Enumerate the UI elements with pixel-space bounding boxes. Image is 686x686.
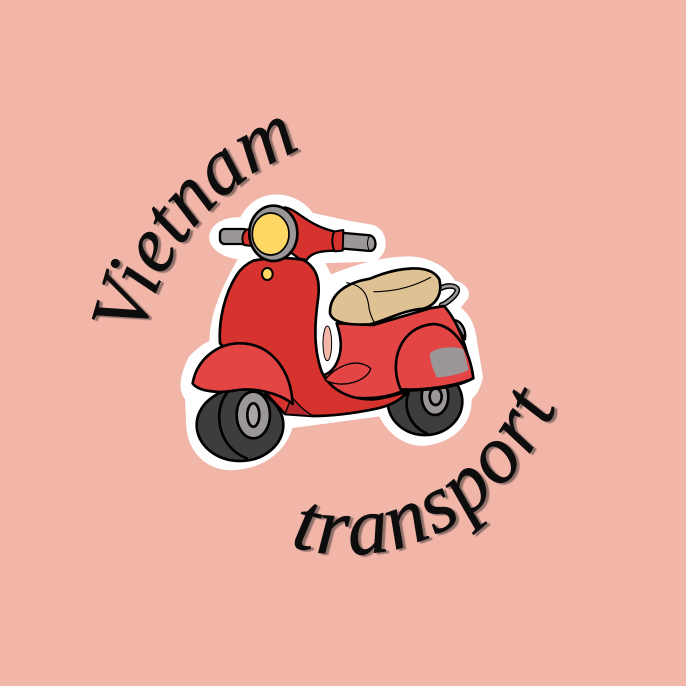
headlight xyxy=(249,206,297,261)
rear cowl xyxy=(396,324,473,390)
rear wheel xyxy=(388,368,462,435)
heading: Vietnam: Vietnam xyxy=(92,118,302,322)
foot rest leaf xyxy=(325,363,371,384)
main body and leg shield xyxy=(220,258,407,416)
rear lamp xyxy=(430,347,469,377)
front wheel xyxy=(197,389,283,461)
rear body xyxy=(324,306,473,398)
collar and left stub xyxy=(242,228,343,251)
under shadow panel xyxy=(285,397,313,416)
indicator button xyxy=(262,268,273,280)
seat xyxy=(330,268,440,325)
icon: red scooter sticker xyxy=(183,197,481,468)
heading: transport: transport xyxy=(294,386,558,558)
sticker white backing xyxy=(183,197,481,468)
left grip xyxy=(220,229,248,244)
right grip xyxy=(339,233,375,251)
tail lamp xyxy=(453,320,465,339)
front fender xyxy=(193,343,293,404)
seat rack xyxy=(441,286,457,305)
side slit xyxy=(323,326,332,361)
handlebar neck xyxy=(280,207,342,260)
